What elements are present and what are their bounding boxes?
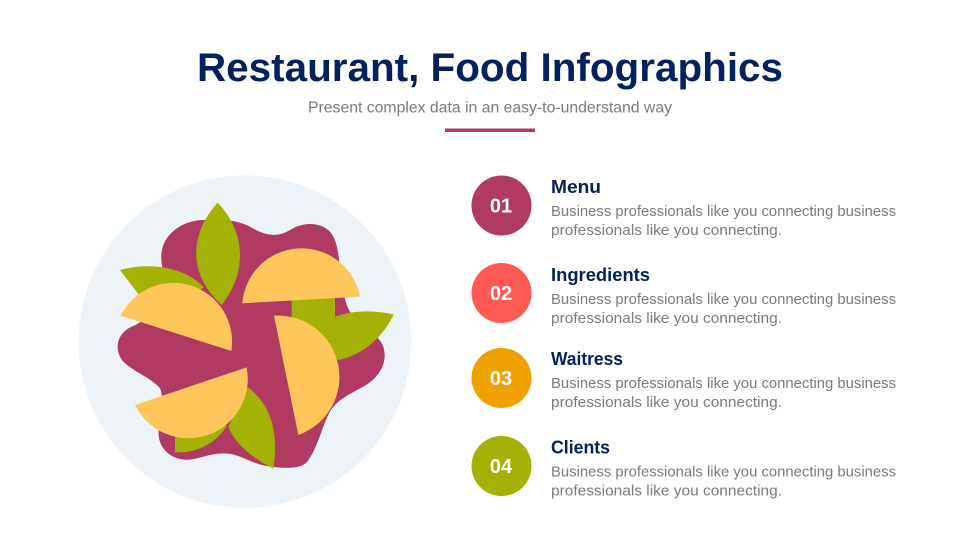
number 01: 01 (490, 196, 512, 218)
body text 04: professionals like you connecting. (551, 484, 782, 500)
heading: Menu: Menu (551, 177, 601, 197)
number 02: 02 (490, 283, 512, 305)
badge 03 (472, 348, 532, 408)
plate (79, 175, 411, 508)
heading: Clients: Clients (551, 438, 610, 458)
number 03: 03 (490, 368, 512, 390)
leaf: left (120, 266, 204, 303)
lemon slice: top right (242, 248, 360, 303)
badge 04 (472, 436, 532, 496)
item 01: Menu (472, 176, 896, 239)
leaf: top (196, 203, 240, 305)
body text 03: Business professionals like you connecting business (551, 376, 896, 392)
item 03: Waitress (472, 348, 896, 411)
body text 03: professionals like you connecting. (551, 395, 782, 411)
body text 01: professionals like you connecting. (551, 223, 782, 239)
title underline (445, 128, 535, 132)
leaf: bottom (228, 387, 275, 469)
body text 02: professionals like you connecting. (551, 311, 782, 327)
body text 02: Business professionals like you connecting business (551, 292, 896, 308)
badge 02 (472, 263, 532, 323)
body text 01: Business professionals like you connecting business (551, 204, 896, 220)
badge 01 (472, 176, 532, 236)
body text 04: Business professionals like you connecting business (551, 464, 896, 480)
sauce blob (118, 219, 385, 468)
heading: Ingredients: Ingredients (551, 265, 650, 285)
lemon slice: left (121, 283, 232, 351)
heading: Waitress: Waitress (551, 349, 623, 369)
leaf: bottom left (175, 425, 227, 452)
leaf: right, behind lemon (292, 297, 394, 360)
lemon slice: right (274, 316, 339, 435)
title: Restaurant, Food Infographics (197, 46, 783, 90)
number 04: 04 (490, 456, 513, 478)
item 04: Clients (472, 436, 896, 500)
item 02: Ingredients (472, 263, 896, 327)
lemon slice: bottom (135, 367, 248, 438)
illustration: plate of food (79, 175, 411, 508)
subtitle: Present complex data in an easy-to-understand way (308, 100, 672, 116)
